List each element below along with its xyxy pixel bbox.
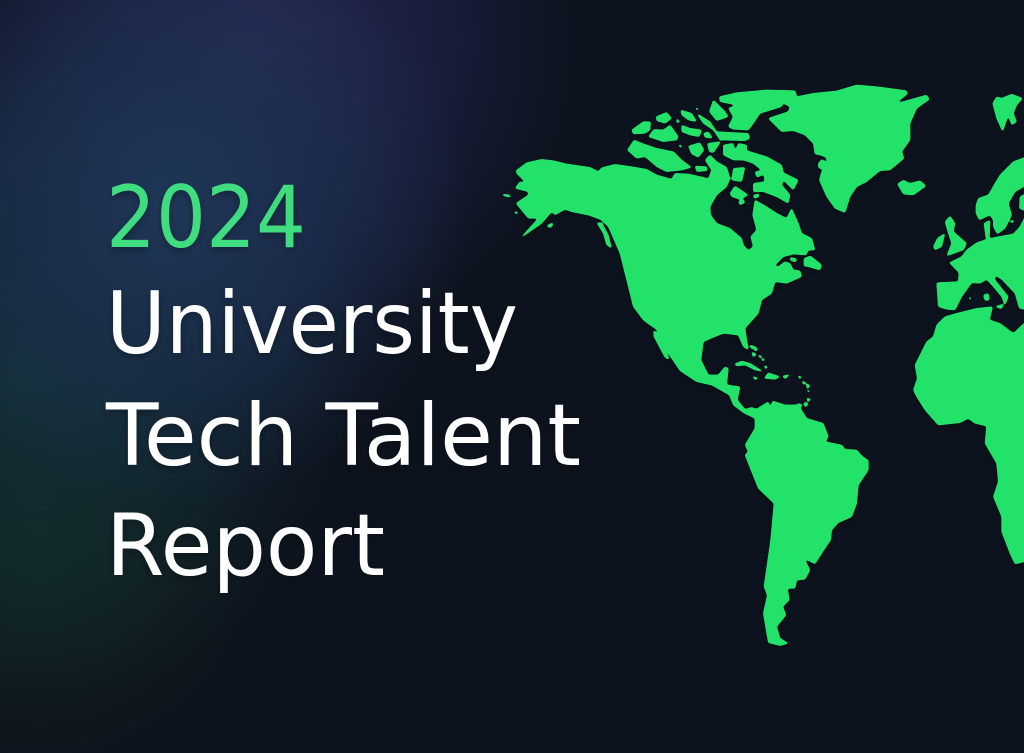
title line: University: University xyxy=(106,274,518,374)
Caribbean islands xyxy=(734,361,763,372)
Newfoundland and Anticosti xyxy=(804,256,822,270)
Greenland, Europe, Africa xyxy=(734,85,1024,646)
Africa xyxy=(913,307,1024,564)
Iceland xyxy=(897,180,926,195)
Svalbard xyxy=(993,94,1023,132)
year: 2024 xyxy=(106,168,306,268)
Arctic islands xyxy=(632,122,651,134)
South America xyxy=(745,401,868,646)
world map xyxy=(502,85,1024,646)
Alaska islands and Baja xyxy=(502,194,511,197)
mainland Europe xyxy=(937,217,1024,310)
UK and Ireland xyxy=(933,233,945,250)
Scandinavia xyxy=(976,157,1024,234)
title xyxy=(105,168,581,596)
title line: Tech Talent: Tech Talent xyxy=(105,386,581,486)
North America xyxy=(502,90,822,420)
title line: Report: Report xyxy=(106,496,385,596)
